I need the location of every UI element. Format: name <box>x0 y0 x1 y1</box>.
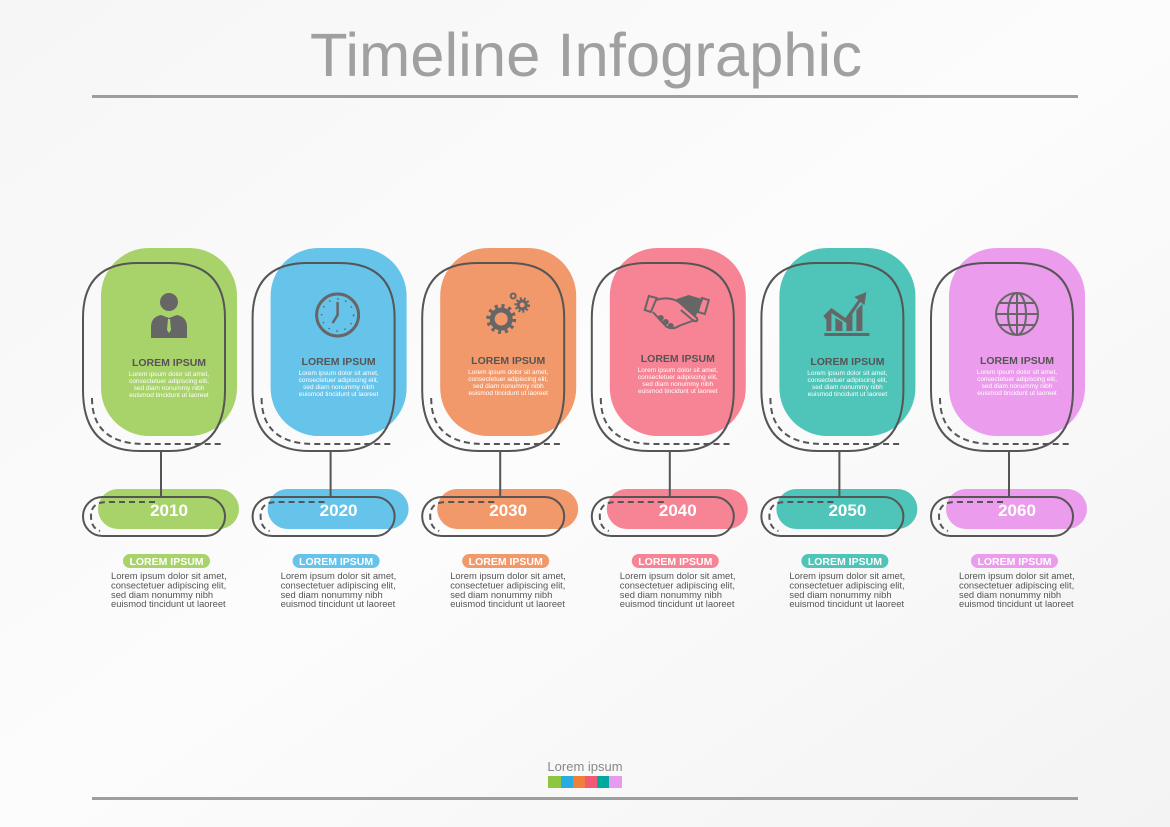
step 1: 2010 <box>83 248 239 609</box>
step 3: 2030: Lorem ipsum dolor sit amet, <box>450 570 566 581</box>
step 1: 2010: sed diam nonummy nibh <box>134 385 205 392</box>
step 6: 2060: consectetuer adipiscing elit, <box>959 580 1074 590</box>
step 3: 2030: euismod tincidunt ut laoreet <box>468 390 548 397</box>
icon: gears <box>488 294 529 332</box>
step 2: 2020: consectetuer adipiscing elit, <box>281 580 396 590</box>
step 5: 2050: euismod tincidunt ut laoreet <box>808 391 887 398</box>
step 4: 2040: Lorem ipsum dolor sit amet, <box>620 570 735 581</box>
step 1: 2010: consectetuer adipiscing elit, <box>129 378 209 385</box>
step 5: 2050: LOREM IPSUM <box>810 356 885 368</box>
step 3: 2030: sed diam nonummy nibh <box>450 589 552 600</box>
step 3: 2030: euismod tincidunt ut laoreet <box>450 598 565 609</box>
icon: globe <box>996 293 1038 335</box>
step 3: 2030: Lorem ipsum dolor sit amet, <box>468 369 548 376</box>
step 2: 2020: euismod tincidunt ut laoreet <box>281 598 396 609</box>
step 6: 2060: euismod tincidunt ut laoreet <box>977 390 1057 397</box>
icon: businessman <box>151 293 187 338</box>
step 3: 2030: 2030 <box>489 501 527 520</box>
step 1: 2010: euismod tincidunt ut laoreet <box>129 392 209 399</box>
step 6: 2060: euismod tincidunt ut laoreet <box>959 598 1074 609</box>
step 6: 2060 <box>931 248 1087 609</box>
step 1: 2010: euismod tincidunt ut laoreet <box>111 598 226 609</box>
step 4: 2040: sed diam nonummy nibh <box>620 589 722 600</box>
step 6: 2060: 2060 <box>998 501 1036 520</box>
step 4: 2040: euismod tincidunt ut laoreet <box>620 598 735 609</box>
step 4: 2040: consectetuer adipiscing elit, <box>638 374 718 381</box>
step 3: 2030 <box>422 248 578 609</box>
icon: handshake <box>645 296 709 328</box>
step 5: 2050: Lorem ipsum dolor sit amet, <box>789 570 905 581</box>
step 3: 2030: LOREM IPSUM <box>469 556 543 568</box>
step 4: 2040: consectetuer adipiscing elit, <box>620 580 735 590</box>
step 3: 2030: LOREM IPSUM <box>471 355 545 367</box>
step 1: 2010: Lorem ipsum dolor sit amet, <box>129 371 209 378</box>
step 5: 2050: consectetuer adipiscing elit, <box>807 377 888 384</box>
icon: clock <box>317 294 359 336</box>
step 3: 2030: consectetuer adipiscing elit, <box>450 580 565 590</box>
step 1: 2010: consectetuer adipiscing elit, <box>111 580 226 590</box>
step 5: 2050: sed diam nonummy nibh <box>789 589 892 600</box>
step 2: 2020: consectetuer adipiscing elit, <box>299 377 379 384</box>
step 4: 2040: LOREM IPSUM <box>641 353 715 365</box>
step 2: 2020: LOREM IPSUM <box>302 356 376 368</box>
step 3: 2030: sed diam nonummy nibh <box>473 383 544 390</box>
step 4: 2040 <box>592 248 748 609</box>
step 1: 2010: LOREM IPSUM <box>129 556 204 568</box>
step 2: 2020 <box>253 248 409 609</box>
step 5: 2050: Lorem ipsum dolor sit amet, <box>807 370 888 377</box>
step 6: 2060: sed diam nonummy nibh <box>959 589 1061 600</box>
step 1: 2010: 2010 <box>150 501 188 520</box>
step 3: 2030: consectetuer adipiscing elit, <box>468 376 548 383</box>
step 6: 2060: Lorem ipsum dolor sit amet, <box>959 570 1075 581</box>
footer legend: Lorem ipsum <box>547 759 623 774</box>
step 1: 2010: sed diam nonummy nibh <box>111 589 213 600</box>
title: Timeline Infographic <box>310 21 862 89</box>
icon: growth chart <box>823 292 869 336</box>
step 1: 2010: Lorem ipsum dolor sit amet, <box>111 570 227 581</box>
step 6: 2060: sed diam nonummy nibh <box>982 383 1053 390</box>
step 4: 2040: 2040 <box>659 501 697 520</box>
step 2: 2020: LOREM IPSUM <box>299 556 373 568</box>
step 6: 2060: consectetuer adipiscing elit, <box>977 376 1057 383</box>
step 2: 2020: euismod tincidunt ut laoreet <box>299 391 379 398</box>
step 5: 2050: euismod tincidunt ut laoreet <box>789 598 904 609</box>
step 4: 2040: sed diam nonummy nibh <box>642 381 714 388</box>
step 4: 2040: Lorem ipsum dolor sit amet, <box>638 367 718 374</box>
step 5: 2050: 2050 <box>828 501 866 520</box>
step 2: 2020: 2020 <box>320 501 358 520</box>
step 4: 2040: euismod tincidunt ut laoreet <box>638 388 718 395</box>
step 5: 2050: LOREM IPSUM <box>808 556 882 568</box>
step 6: 2060: Lorem ipsum dolor sit amet, <box>977 369 1057 376</box>
step 2: 2020: Lorem ipsum dolor sit amet, <box>298 370 379 377</box>
step 2: 2020: Lorem ipsum dolor sit amet, <box>281 570 396 581</box>
step 2: 2020: sed diam nonummy nibh <box>303 384 374 391</box>
step 6: 2060: LOREM IPSUM <box>977 556 1052 568</box>
step 5: 2050: sed diam nonummy nibh <box>812 384 883 391</box>
step 1: 2010: LOREM IPSUM <box>132 357 206 369</box>
footer legend <box>547 759 623 788</box>
step 5: 2050: consectetuer adipiscing elit, <box>789 580 905 590</box>
step 4: 2040: LOREM IPSUM <box>638 556 713 568</box>
step 2: 2020: sed diam nonummy nibh <box>281 589 383 600</box>
step 5: 2050 <box>761 248 917 609</box>
step 6: 2060: LOREM IPSUM <box>980 355 1054 367</box>
